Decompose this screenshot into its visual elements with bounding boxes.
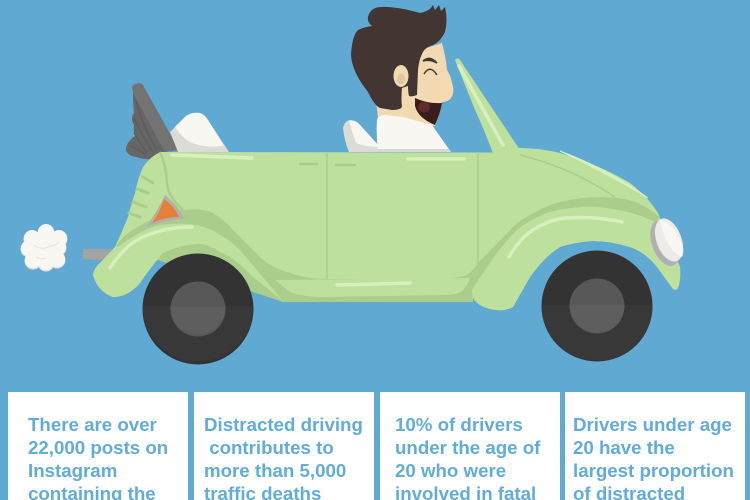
panel: Instagram posts fact <box>8 392 188 500</box>
open mouth <box>415 98 442 125</box>
rear seat <box>170 113 229 152</box>
panel: largest proportion fact <box>565 392 745 500</box>
eyebrow <box>423 58 437 63</box>
nose <box>438 70 453 102</box>
door seams <box>327 152 615 279</box>
hood highlight <box>560 151 648 198</box>
front fender <box>472 207 680 310</box>
hair <box>351 5 446 110</box>
running board <box>275 278 470 297</box>
front seat <box>343 120 383 152</box>
closed eye <box>424 69 437 75</box>
icon: exhaust smoke puff <box>20 224 68 272</box>
panel: drivers under 20 fact <box>380 392 560 500</box>
illustration: man driving green convertible car <box>20 5 684 364</box>
highlights <box>110 155 622 285</box>
panel: traffic deaths fact <box>194 392 374 500</box>
icon: exhaust pipe <box>83 249 118 260</box>
shirt shadow <box>378 149 451 152</box>
icon: tail light <box>146 195 184 227</box>
rear seam <box>160 152 183 210</box>
rear vents <box>129 177 153 217</box>
icon: headlight <box>645 215 688 270</box>
driver <box>351 5 453 152</box>
windscreen frame <box>455 58 520 153</box>
front wheel <box>542 250 652 362</box>
neck and face <box>376 43 453 126</box>
shirt <box>377 115 451 152</box>
rear fender <box>93 224 283 301</box>
ear <box>394 65 408 87</box>
door handles <box>300 164 355 165</box>
dark fender band and sill <box>116 197 660 302</box>
folded convertible roof <box>126 83 178 159</box>
rear wheel <box>142 254 254 364</box>
tongue <box>418 102 430 112</box>
car body <box>93 148 680 310</box>
inner ear <box>397 74 405 84</box>
